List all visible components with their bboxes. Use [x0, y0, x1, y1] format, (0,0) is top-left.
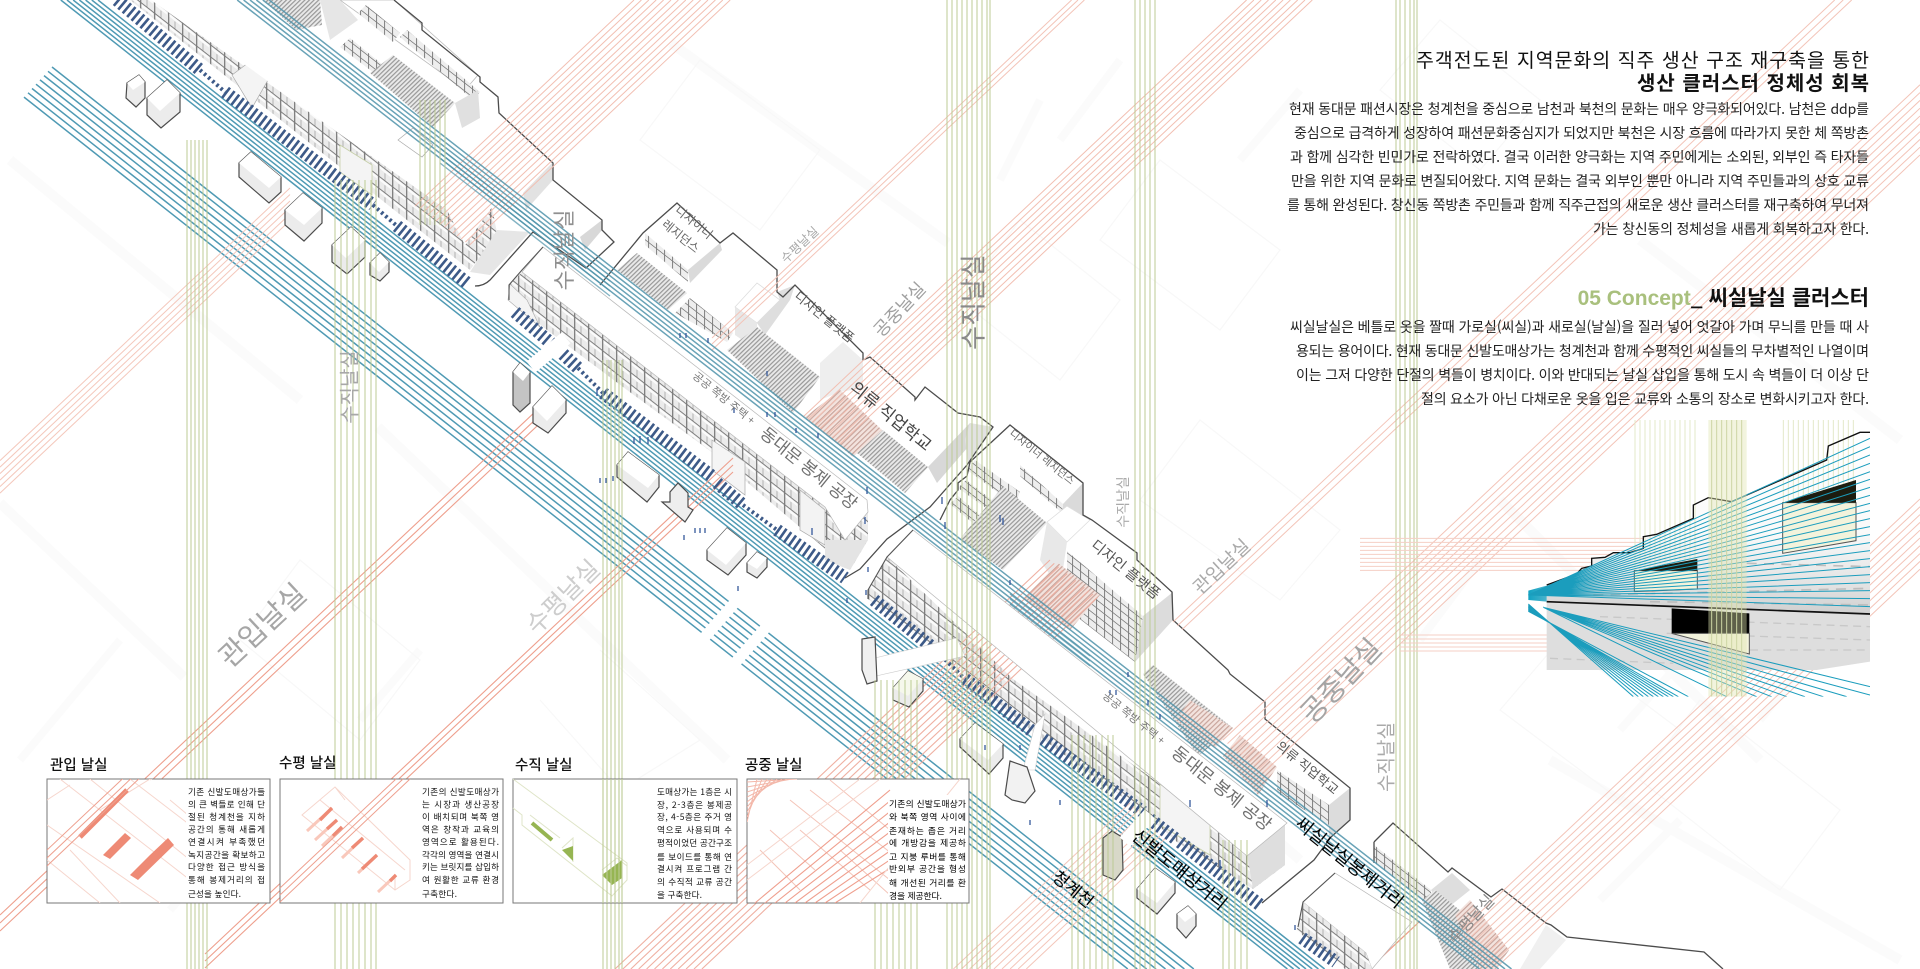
- label: 관입날실 right: 관입날실: [1186, 532, 1256, 600]
- red weft over row 1 roof: [415, 0, 730, 245]
- panel diagram: [47, 779, 186, 903]
- small buildings in the plaza: [126, 75, 1196, 938]
- 관입날실 narrow bundle: [0, 395, 553, 931]
- small building 14: [893, 671, 923, 707]
- 관입날실 bundle far left: [0, 188, 290, 493]
- text block: intro paragraph: 만을 위한 지역 문화로 변질되어왔다. 지역 문화는 결국 외부인 뿐만 아니라 지역 주민들과의 상호 교류: [1291, 171, 1869, 191]
- red lines on row 4: [1372, 921, 1420, 966]
- label: 의류 직업학교 row 2: 의류 직업학교: [846, 374, 938, 456]
- panel body text: 을 구축한다.: [657, 889, 702, 901]
- text block: concept paragraph: [1290, 317, 1869, 409]
- panel: 공중 날실: [745, 754, 969, 903]
- central translucent green column: [1708, 420, 1747, 697]
- building row 4: rear block: [1374, 823, 1723, 969]
- small building 9: [617, 452, 659, 502]
- panel body text: 반외부 공간을 형성: [889, 862, 966, 875]
- label: 수직날실 top: 수직날실: [547, 210, 579, 290]
- panel heading: 수평 날실: [279, 752, 336, 773]
- blue street bundle: 청계천: [24, 67, 1194, 969]
- panel body text: 는 시장과 생산공장: [422, 798, 499, 810]
- 공중날실 right bundle: [1223, 85, 1920, 772]
- panel body text: [889, 797, 966, 902]
- far right red bundle: [1455, 499, 1920, 968]
- horizontal red weft: [1360, 538, 1643, 652]
- panel body text: 고 지붕 루버를 통해: [889, 850, 966, 863]
- panel body text: 다양한 접근 방식을: [188, 861, 265, 873]
- building row 2: front facade: [508, 272, 868, 570]
- text block: main title: 생산 클러스터 정체성 회복: [1637, 67, 1869, 96]
- label: 수직날실 big: 수직날실: [954, 254, 990, 350]
- panel body text: 를 보이드를 통해 연: [657, 851, 732, 863]
- panel body text: 절된 청계천을 지하: [188, 811, 265, 823]
- label: 공공 쪽방 주택 row 3: 공공 쪽방 주택 +: [1099, 688, 1169, 748]
- label: 신발도매상거리: 신발도매상거리: [1127, 822, 1233, 916]
- map labels: [208, 201, 1499, 948]
- facade photo texture: [1593, 563, 1870, 605]
- crosswalk gaps in the street bundle: [704, 599, 769, 663]
- label: 수평날실 upper: 수평날실: [776, 221, 822, 267]
- small building 6: [370, 253, 389, 281]
- window: lower: [1672, 608, 1749, 654]
- text block: intro paragraph: [1287, 99, 1869, 239]
- label: 수직날실 left: 수직날실: [334, 350, 362, 424]
- text block: intro paragraph: 현재 동대문 패션시장은 청계천을 중심으로 남천과 북천의 문화는 매우 양극화되어있다. 남천은 ddp를: [1289, 99, 1869, 119]
- small building 12: [747, 552, 767, 578]
- label: 씨실날실봉제거리: 씨실날실봉제거리: [1290, 810, 1410, 914]
- label: 수직날실 row 3: 수직날실: [1113, 476, 1133, 528]
- stair tower 1: [513, 363, 530, 412]
- label: 동대문 봉제 공장 row 3: 동대문 봉제 공장: [1167, 740, 1277, 836]
- building row 1: front facade: [130, 0, 530, 275]
- panel frame: [47, 779, 270, 903]
- small building 11: [707, 528, 746, 575]
- panel body text: [188, 786, 265, 900]
- photo texture: [1550, 616, 1870, 664]
- panel heading: 관입 날실: [50, 754, 107, 775]
- text block: concept paragraph: 이는 그저 다양한 단절의 벽들이 병치이다. 이와 반대되는 날실 삽입을 통해 도시 속 벽들이 더 이상 단: [1296, 365, 1869, 385]
- 수평날실 upper bundle: [712, 0, 1084, 350]
- panel diagram: [747, 779, 968, 903]
- panel body text: 공간의 통해 새롭게: [188, 824, 265, 836]
- panel: 수직 날실: [513, 754, 737, 903]
- panel body text: 기존 신발도매상가들: [188, 786, 265, 798]
- stair unit: [662, 483, 693, 522]
- window: upper right: [1783, 480, 1856, 553]
- label: 관입날실 large: 관입날실: [208, 572, 314, 676]
- panel frame: [513, 779, 737, 903]
- label: 수평날실 lower: 수평날실: [517, 551, 607, 641]
- panel heading: 공중 날실: [745, 754, 802, 775]
- panel body text: 경을 제공한다.: [889, 889, 942, 902]
- panel body text: 장, 2-3층은 봉제공: [657, 799, 732, 811]
- text block: main title: [1416, 44, 1869, 96]
- concept image: woven street perspective: [1360, 420, 1870, 697]
- panel body text: 기존의 신발도매상가: [422, 786, 499, 798]
- label: 수평날실 bottom right: 수평날실: [1441, 888, 1499, 948]
- dotted hatch connectors: [200, 70, 965, 679]
- panel body text: 구축한다.: [422, 888, 457, 900]
- bridge tower and skybridge: [862, 637, 965, 684]
- panel body text: 평적이었던 공간구조: [657, 837, 732, 849]
- label: 디자인 플랫폼 row 2: 디자인 플랫폼: [791, 286, 859, 346]
- teal convergence block: [1528, 586, 1547, 602]
- panel body text: 기존의 신발도매상가: [889, 797, 966, 810]
- building roofs: rows 1 to 4: [155, 0, 1412, 969]
- small building 4: [285, 193, 322, 241]
- teal ground fan dense: [1528, 604, 1688, 697]
- panel body text: 에 개방감을 제공하: [889, 836, 966, 849]
- label: 공중날실 upper: 공중날실: [867, 276, 931, 342]
- text block: main title: 주객전도된 지역문화의 직주 생산 구조 재구축을 통한: [1416, 44, 1869, 73]
- panel diagram: [280, 779, 410, 902]
- window: upper left: [1634, 559, 1697, 592]
- panel body text: 이 배치되며 북쪽 영: [422, 811, 499, 823]
- panel body text: 의 큰 벽들로 인해 단: [188, 798, 265, 810]
- text block: intro paragraph: 가는 창신동의 정체성을 새롭게 회복하고자 한다.: [1593, 219, 1869, 239]
- small building 15: [960, 723, 1003, 774]
- facade above the street: [1546, 538, 1870, 614]
- label: 디자이너 레지던스 row 2: [658, 201, 717, 257]
- street edge: [1547, 602, 1870, 614]
- panel body text: 도매상가는 1층은 시: [657, 786, 732, 798]
- panel body text: 역은 창작과 교육의: [422, 824, 499, 836]
- lower red bundle: [953, 803, 1170, 969]
- building row 1: rear block: [253, 0, 614, 286]
- label: 디자인 플랫폼 row 3: 디자인 플랫폼: [1087, 534, 1165, 604]
- panel body text: 와 북쪽 영역 사이에: [889, 810, 966, 823]
- label: 디자이너 레지던스 row 2: 디자이너: [671, 201, 717, 243]
- panel body text: 여 원활한 교류 환경: [422, 874, 499, 886]
- street photo ground: [1547, 602, 1870, 670]
- panel body text: 의 수직적 교류 공간: [657, 876, 732, 888]
- teal ground fan sparse: [1543, 607, 1870, 697]
- label: 청계천: 청계천: [1048, 864, 1100, 912]
- panel body text: 해 개선된 거리를 환: [889, 876, 966, 889]
- 공중날실 upper bundle: [803, 0, 1312, 445]
- label: 의류 직업학교 row 3: 의류 직업학교: [1273, 736, 1343, 798]
- small building 8: [533, 386, 566, 433]
- text block: intro paragraph: 를 통해 완성된다. 창신동 쪽방촌 주민들과 함께 직주근접의 새로운 생산 클러스터를 재구축하여 무너져: [1287, 195, 1869, 215]
- green warp bundles: [187, 0, 1417, 969]
- text block: intro paragraph: 중심으로 급격하게 성장하여 패션문화중심지가 되었지만 북천은 시장 흐름에 따라가지 못한 체 쪽방촌: [1294, 123, 1869, 143]
- text block: concept paragraph: 용되는 용어이다. 현재 동대문 신발도매상가는 청계천과 함께 수평적인 씨실들의 무차별적인 나열이며: [1296, 341, 1869, 361]
- second overlapping blue segment: [440, 148, 1090, 666]
- building row 3: rear block: [940, 425, 1350, 903]
- text block: intro paragraph: 과 함께 심각한 빈민가로 전락하였다. 결국 이러한 양극화는 지역 주민에게는 소외된, 외부인 즉 타자들: [1290, 147, 1869, 167]
- panel body text: 영역으로 활용된다.: [422, 836, 499, 848]
- label: 공중날실 big: 공중날실: [1290, 629, 1390, 731]
- panel body text: 연결시켜 부족했던: [188, 836, 265, 848]
- label: 공공 쪽방 주택 row 2: 공공 쪽방 주택 +: [689, 368, 759, 428]
- panel body text: 각각의 영역을 연결시: [422, 849, 499, 861]
- panel: 수평 날실: [279, 752, 503, 903]
- panel diagram: [513, 779, 627, 903]
- text block: concept paragraph: 씨실날실은 베틀로 옷을 짤때 가로실(씨실)과 새로실(날실)을 질러 넣어 엇갈아 가며 무늬를 만들 때 사: [1290, 317, 1869, 337]
- small building 1: [126, 75, 145, 107]
- stair tower 2: [1103, 831, 1123, 880]
- facade outline: [1547, 432, 1870, 585]
- panel body text: 근성을 높인다.: [188, 888, 241, 900]
- heading: 05 Concept: 05 Concept_ 씨실날실 클러스터: [1578, 282, 1869, 312]
- panel body text: 키는 브릿지를 삽입하: [422, 861, 499, 873]
- panel body text: 존재하는 좁은 거리: [889, 824, 966, 837]
- small building 18: [1177, 906, 1196, 938]
- label: 동대문 봉제 공장 row 2: 동대문 봉제 공장: [756, 420, 864, 514]
- small building 2: [147, 80, 180, 128]
- central wide red bundle: [615, 560, 1097, 969]
- panel body text: 녹지공간을 확보하고: [188, 849, 265, 861]
- panel body text: [422, 786, 499, 900]
- people markers: [597, 333, 1295, 930]
- panel frame: [280, 779, 503, 903]
- text block: concept paragraph: 절의 요소가 아닌 다채로운 옷을 입은 교류와 소통의 장소로 변화시키고자 한다.: [1421, 389, 1869, 409]
- panel frame: [747, 779, 969, 903]
- building row 2: rear block: [600, 203, 993, 578]
- skybridge stair 2: [1005, 714, 1045, 803]
- building row 3: front facade: [868, 557, 1285, 889]
- teal facade fan: [1528, 438, 1870, 607]
- 수평날실 narrow bundle: [205, 458, 733, 968]
- panel: 관입 날실: [46, 758, 270, 904]
- blue bundle between the building rows: [237, 0, 1512, 969]
- pedestrian hatching along the facades: [117, 0, 1336, 962]
- small building 17: [1137, 868, 1175, 914]
- label: 디자이너 레지던스 row 3: 디자이너 레지던스: [1006, 426, 1078, 488]
- small building 3: [239, 152, 281, 203]
- 관입날실 right thin bundle: [1173, 0, 1852, 630]
- green warp verticals: [1635, 420, 1853, 570]
- label: 디자이너 레지던스 row 2: 레지던스: [658, 215, 704, 257]
- panel body text: 통해 봉제거리의 접: [188, 874, 265, 886]
- panel body text: 결시켜 프로그램 간: [657, 863, 732, 875]
- panel body text: [657, 786, 732, 901]
- bridges over the hatch: [531, 338, 1150, 842]
- panel heading: 수직 날실: [515, 754, 572, 775]
- blue street bundle: 신발도매상거리: [61, 0, 1325, 969]
- panel body text: 장, 4-5층은 주거 영: [657, 811, 732, 823]
- panel body text: 역으로 사용되며 수: [657, 824, 732, 836]
- label: 수직날실 right: 수직날실: [1372, 722, 1398, 792]
- small building 5: [332, 227, 365, 274]
